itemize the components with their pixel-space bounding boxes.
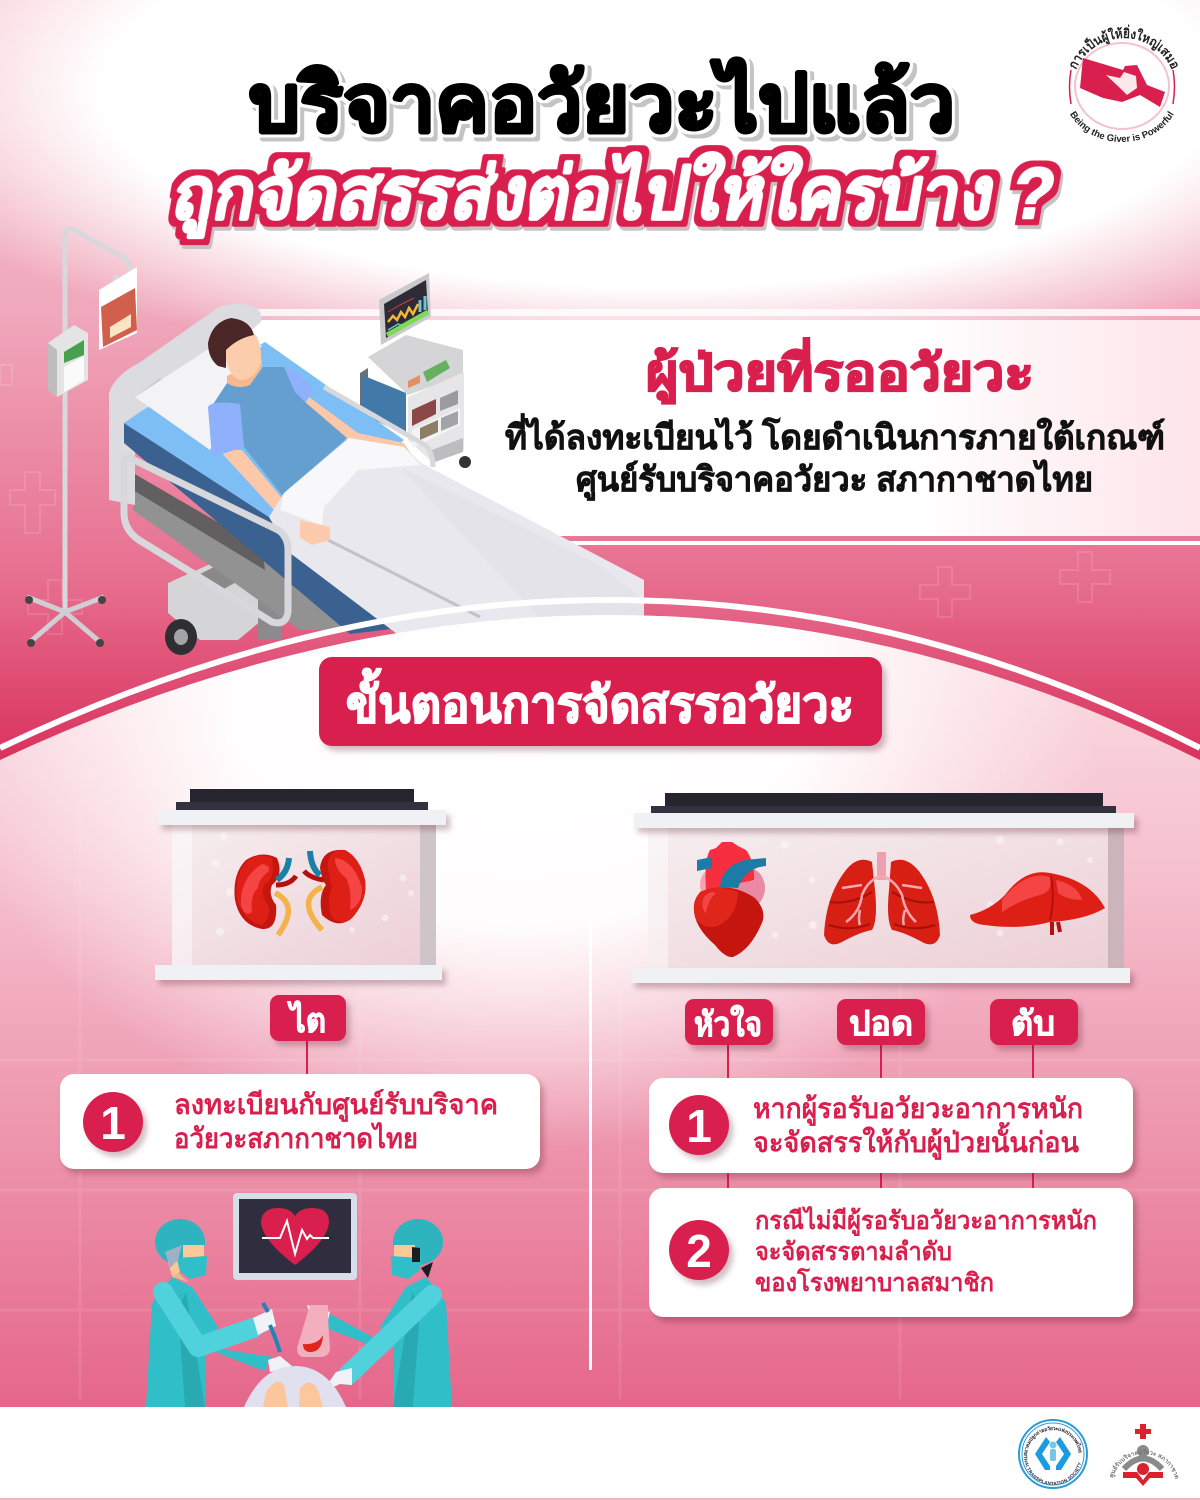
title line 2: ถูกจัดสรรส่งต่อไปให้ใครบ้าง ?	[166, 152, 1062, 239]
tag: lung: ปอด	[849, 1005, 913, 1043]
headboard	[109, 304, 261, 505]
panel: white waiting-patient band	[240, 309, 1200, 545]
patient head	[208, 318, 262, 387]
bed rail	[124, 458, 288, 623]
tag: heart: หัวใจ	[694, 1004, 762, 1044]
curved divider and lower background	[0, 600, 1200, 1410]
card text	[755, 1205, 1097, 1297]
badge 2: 2	[686, 1225, 712, 1277]
logo: red cross organ donation centre: ศูนย์รับบริจาคอวัยวะ สภากาชาดไทย	[1110, 1449, 1178, 1479]
icon: blood bag	[99, 267, 137, 350]
title line 1: บริจาคอวัยวะไปแล้ว	[249, 57, 955, 148]
icon: lungs	[824, 852, 940, 944]
illustration: surgeons	[146, 1193, 452, 1407]
logo: thai transplantation society: สมาคมปลูกถ่ายอวัยวะแห่งประเทศไทย	[1024, 1426, 1082, 1456]
text: registered patients criteria: ศูนย์รับบริจาคอวัยวะ สภากาชาดไทย	[576, 459, 1093, 501]
bed frame	[133, 473, 400, 655]
tag: liver: ตับ	[1011, 1005, 1055, 1043]
illustration: monitor cart	[360, 273, 471, 468]
card text: อวัยวะสภากาชาดไทย	[174, 1122, 418, 1154]
illustration: patient in hospital bed	[109, 304, 644, 655]
tag: lung	[837, 999, 925, 1045]
heading: allocation process: ขั้นตอนการจัดสรรอวัยวะ	[346, 668, 854, 733]
card: step 1 severe condition	[649, 1078, 1133, 1173]
card text: จะจัดสรรให้กับผู้ป่วยนั้นก่อน	[753, 1121, 1079, 1160]
background: upper gradient	[0, 0, 1200, 770]
icon: infusion pump	[48, 325, 88, 397]
card text: ลงทะเบียนกับศูนย์รับบริจาค	[174, 1089, 498, 1122]
panel heading: waiting patients: ผู้ป่วยที่รออวัยวะ	[646, 338, 1034, 404]
tag and connector: kidney	[270, 995, 346, 1076]
tag: liver	[990, 999, 1078, 1045]
icon: heart	[694, 842, 766, 957]
patient sheet	[244, 1366, 346, 1407]
organ bag	[297, 1305, 330, 1357]
text: registered patients criteria	[505, 413, 1165, 501]
pillow	[135, 345, 262, 450]
badge 1: 1	[100, 1097, 126, 1149]
badge 1: 1	[686, 1100, 712, 1152]
card text: กรณีไม่มีผู้รอรับอวัยวะอาการหนัก	[755, 1205, 1097, 1237]
logo: being the giver is powerful	[1068, 24, 1178, 142]
icon: liver	[970, 872, 1105, 935]
panel: right organ box	[631, 793, 1134, 983]
card text	[753, 1093, 1083, 1160]
ecg monitor	[233, 1193, 357, 1280]
blanket	[269, 438, 644, 640]
tag and connector: kidney: ไต	[287, 1000, 326, 1040]
logo: thai transplantation society	[1018, 1419, 1088, 1489]
card text: หากผู้รอรับอวัยวะอาการหนัก	[753, 1093, 1083, 1126]
text: registered patients criteria: ที่ได้ลงทะเบียนไว้ โดยดำเนินการภายใต้เกณฑ์	[505, 413, 1165, 457]
illustration: IV stand	[25, 229, 137, 647]
mattress	[124, 342, 404, 634]
logo thai text: การเป็นผู้ให้ยิ่งใหญ่เสมอ	[1070, 24, 1178, 70]
card: kidney step 1	[60, 1074, 540, 1169]
heading: allocation process	[319, 657, 882, 746]
card: step 2 hospital order	[649, 1188, 1133, 1317]
badge 1	[669, 1095, 729, 1155]
logo english text: Being the Giver is Powerful	[1070, 110, 1174, 142]
icon: kidneys	[234, 850, 365, 935]
tags and connectors: heart lung liver	[685, 999, 1078, 1190]
badge 2	[669, 1220, 729, 1280]
card text: จะจัดสรรตามลำดับ	[755, 1238, 952, 1266]
surgeon right	[307, 1219, 452, 1407]
panel: left organ box with kidneys	[155, 789, 446, 980]
icon: hands forming heart	[1080, 58, 1165, 107]
card text: ของโรงพยาบาลสมาชิก	[755, 1267, 994, 1297]
badge 1	[83, 1092, 143, 1152]
title	[166, 57, 1062, 239]
logo: thai transplantation society: THAI TRANSPLANTATION SOCIETY	[1024, 1456, 1081, 1485]
surgeon left	[146, 1219, 292, 1407]
card text	[174, 1089, 498, 1154]
patient body	[208, 318, 412, 542]
syringe	[263, 1303, 280, 1352]
